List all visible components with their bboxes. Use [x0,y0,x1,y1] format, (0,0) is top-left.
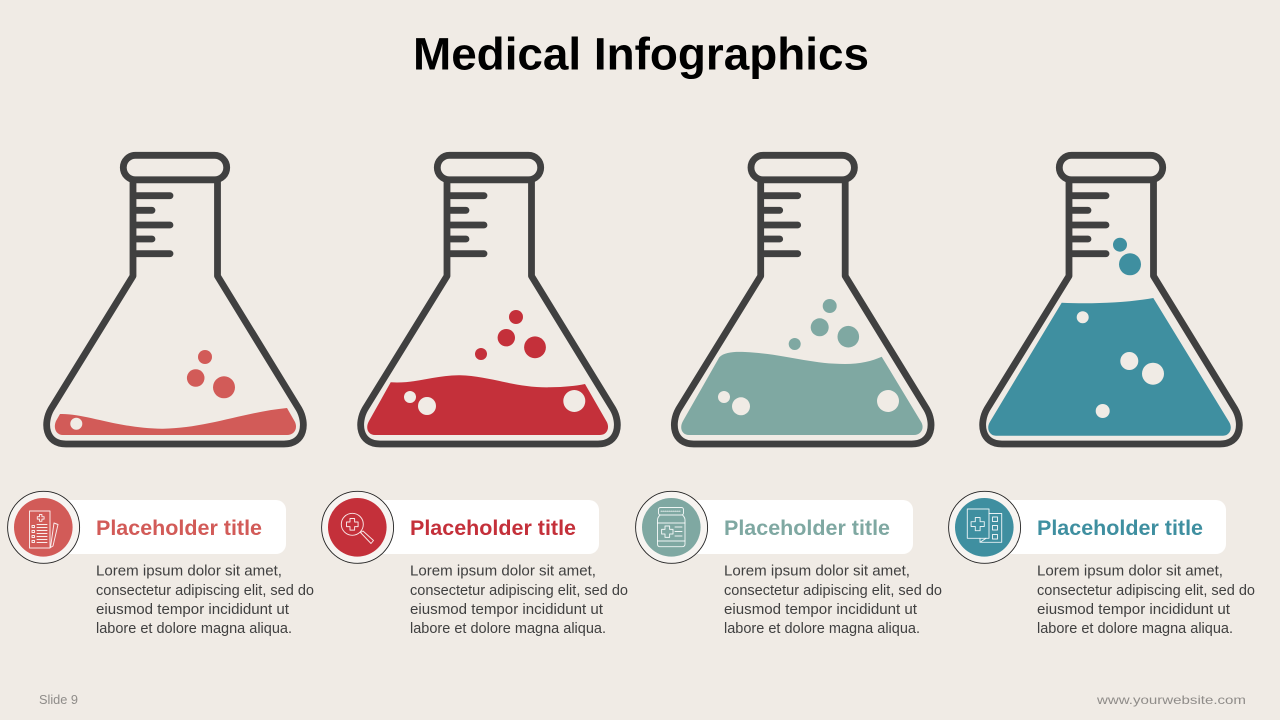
bubbles [70,350,235,430]
footer: slide number: Slide 9 [39,692,78,707]
panel: item 2 [322,491,628,637]
item title: Placeholder title [724,517,890,540]
flask outline [983,155,1239,444]
flask outline [674,155,931,444]
icon: magnifier with cross [341,513,374,544]
body text: Lorem ipsum dolor sit amet, [410,562,596,580]
flask outline [361,155,617,444]
body text: Lorem ipsum dolor sit amet, [724,562,910,580]
liquid [681,352,923,435]
body text [724,562,942,637]
liquid [55,408,296,435]
footer: website: www.yourwebsite.com [1096,693,1246,707]
icon badge [949,491,1021,563]
bubbles [1077,238,1164,418]
flask outline [47,155,303,444]
item title: Placeholder title [1037,517,1203,540]
flask 3: sage, higher level [674,155,931,444]
body text: consectetur adipiscing elit, sed do [1037,582,1255,599]
body text [96,562,314,637]
icon: medicine bottle [658,508,685,547]
body text: eiusmod tempor incididunt ut [1037,601,1231,618]
panel: item 4 [949,491,1255,637]
title card [50,500,286,554]
title card [678,500,913,554]
title card [364,500,599,554]
body text: labore et dolore magna aliqua. [1037,620,1233,637]
icon badge [322,491,394,563]
title: Medical Infographics [413,28,869,80]
flask 1: red, low level [47,155,303,444]
liquid [988,298,1231,436]
bubbles [718,299,899,415]
body text: eiusmod tempor incididunt ut [724,601,918,618]
body text: eiusmod tempor incididunt ut [410,601,604,618]
liquid [367,375,608,435]
item title: Placeholder title [410,517,576,540]
flask 4: teal, high level [983,155,1239,444]
body text: Lorem ipsum dolor sit amet, [1037,562,1223,580]
body text: Lorem ipsum dolor sit amet, [96,562,282,580]
title card [991,500,1226,554]
body text: labore et dolore magna aliqua. [410,620,606,637]
body text: consectetur adipiscing elit, sed do [96,582,314,599]
panel: item 3 [636,491,942,637]
body text: eiusmod tempor incididunt ut [96,601,290,618]
body text: labore et dolore magna aliqua. [96,620,292,637]
body text: labore et dolore magna aliqua. [724,620,920,637]
body text: consectetur adipiscing elit, sed do [724,582,942,599]
item title: Placeholder title [96,517,262,540]
panel: item 1 [8,491,314,637]
icon: medical documents [967,509,1002,542]
body text: consectetur adipiscing elit, sed do [410,582,628,599]
bubbles [404,310,585,415]
icon badge [8,491,80,563]
flask 2: crimson, mid level [361,155,617,444]
icon badge [636,491,708,563]
body text [410,562,628,637]
body text [1037,562,1255,637]
icon: medical report [30,511,58,548]
